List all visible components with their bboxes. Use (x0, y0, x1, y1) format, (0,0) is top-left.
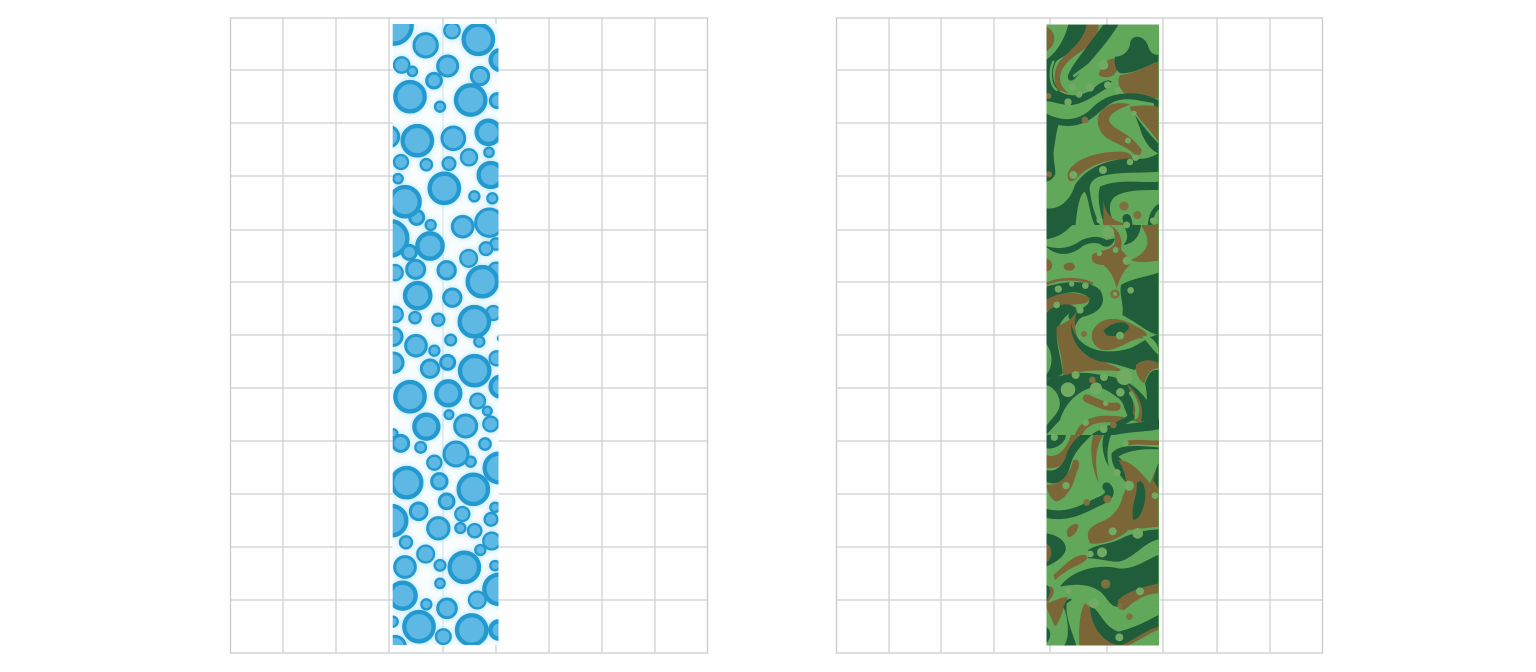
panel: right grid with camouflage strip (836, 18, 1322, 653)
bubble pattern strip (392, 24, 498, 645)
camouflage pattern strip (1045, 23, 1160, 648)
panel: left grid with bubble strip (230, 7, 708, 657)
right grid (836, 18, 1322, 653)
left grid (230, 18, 708, 653)
